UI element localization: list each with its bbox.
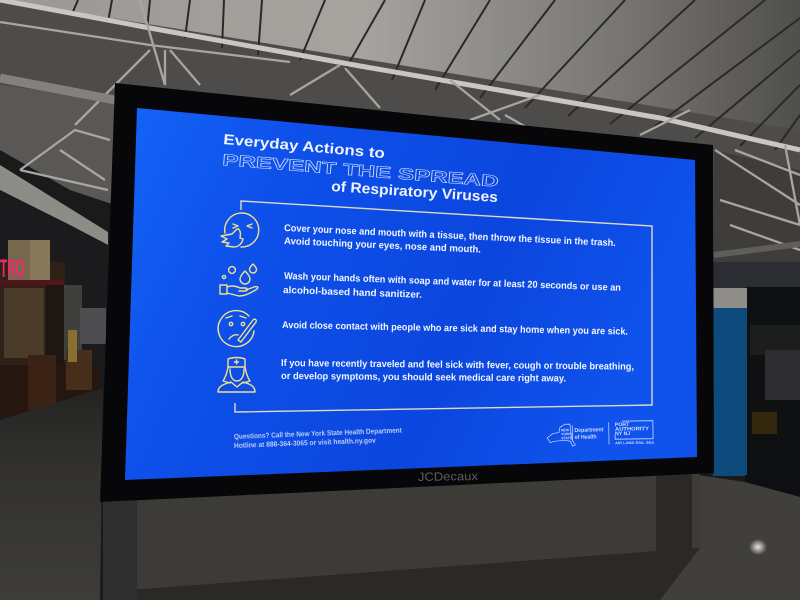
- icon: nurse: [218, 358, 255, 392]
- icon: sick face with thermometer: [218, 311, 256, 347]
- instruction 2 text: alcohol-based hand sanitizer.: [283, 285, 422, 301]
- content bracket frame: [235, 201, 652, 412]
- screen panel: [125, 108, 697, 480]
- icon: New York State outline: [547, 424, 575, 447]
- background: lower wall behind display: [130, 470, 700, 590]
- instruction 1 text: Cover your nose and mouth with a tissue, then throw the tissue in the trash.: [284, 223, 616, 249]
- background: left terminal storefront: TRO: [0, 255, 25, 283]
- hotline footer text: [234, 426, 402, 450]
- logo: New York State Department of Health: Department: [574, 427, 604, 434]
- icon: sneezing face: [221, 213, 259, 247]
- logo: New York State Department of Health: STATE: [561, 436, 573, 440]
- instruction 4 text: [281, 358, 634, 384]
- instruction 3 text: Avoid close contact with people who are sick and stay home when you are sick.: [282, 320, 628, 338]
- brand label: JCDecaux: [418, 469, 478, 484]
- background: right side terminal and ad panel: [640, 262, 800, 600]
- logo: Port Authority NY NJ: PORT: [615, 422, 630, 428]
- background: left terminal storefront: [0, 240, 106, 415]
- logo: Port Authority NY NJ: AUTHORITY: [615, 426, 650, 433]
- hotline footer text: Questions? Call the New York State Health Department: [234, 426, 402, 441]
- title line 1: Everyday Actions to: [223, 132, 386, 162]
- title line 3: of Respiratory Viruses: [331, 179, 498, 206]
- instruction 2 text: Wash your hands often with soap and water for at least 20 seconds or use an: [284, 271, 621, 294]
- logo: Port Authority NY NJ: NY NJ: [615, 431, 630, 437]
- hotline footer text: Hotline at 888-364-3065 or visit health.ny.gov: [234, 436, 377, 450]
- icon: washing hand with droplets: [220, 264, 258, 296]
- logo: New York State Department of Health: of Health: [575, 434, 597, 441]
- ad panel: [713, 288, 747, 476]
- title: [222, 132, 499, 206]
- instruction 4 text: If you have recently traveled and feel sick with fever, cough or trouble breathing,: [281, 358, 634, 373]
- logo: New York State Department of Health: NEW: [561, 428, 570, 432]
- display frame: [100, 83, 714, 502]
- logo: Port Authority NY NJ: [608, 421, 655, 445]
- instruction 4 text: or develop symptoms, you should seek medical care right away.: [281, 371, 566, 384]
- logo: New York State Department of Health: [547, 423, 604, 447]
- display support legs: [103, 470, 692, 600]
- logo: Port Authority NY NJ: AIR LAND RAIL SEA: [615, 441, 655, 445]
- title line 2 outlined: PREVENT THE SPREAD: [222, 152, 499, 191]
- instruction 1 text: Avoid touching your eyes, nose and mouth.: [284, 236, 481, 256]
- background: floor: [0, 388, 103, 600]
- logo: New York State Department of Health: YORK: [561, 432, 572, 436]
